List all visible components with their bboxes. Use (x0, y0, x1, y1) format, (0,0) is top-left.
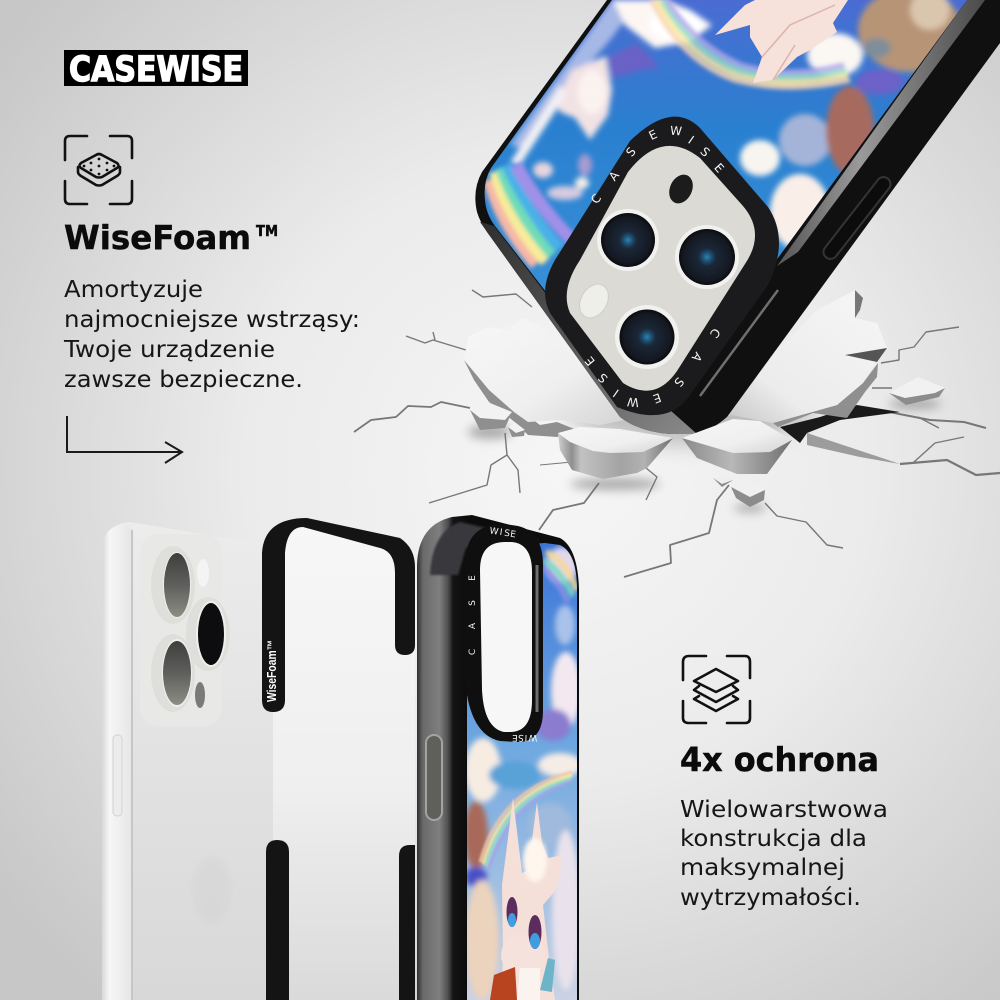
ring text: E (651, 390, 663, 406)
bottom small chunks (713, 475, 765, 507)
centre-right chunk top (682, 419, 792, 453)
logo: CASEWISE (69, 50, 243, 90)
small clouds (533, 162, 553, 178)
ring text: A (688, 349, 705, 365)
cloud band top (613, 0, 712, 48)
shadows of chunks (468, 399, 941, 512)
right clouds (779, 114, 831, 166)
right chunk side (773, 363, 878, 427)
text: protection description: wytrzymałości. (680, 883, 861, 911)
text: protection description: maksymalnej (680, 853, 845, 881)
ring text: A (468, 622, 478, 629)
kitten (490, 798, 563, 1000)
camera ring (545, 117, 779, 415)
ring window (480, 542, 532, 732)
right rock (889, 377, 945, 405)
text: WiseFoam description: Twoje urządzenie (63, 335, 275, 363)
dark hole (780, 405, 900, 443)
ring text: I (611, 386, 621, 400)
pale upper-left sky (510, 0, 640, 150)
text: protection description (680, 795, 888, 911)
side button (821, 174, 893, 262)
text: protection description: konstrukcja dla (680, 824, 867, 852)
notch (855, 290, 863, 318)
ring text (582, 124, 727, 409)
ring text: S (697, 144, 713, 160)
ring text: S (518, 732, 524, 742)
text: WiseFoam description: najmocniejsze wstrząsy: (64, 305, 360, 333)
arrow (67, 416, 182, 463)
heading: WiseFoam: TM (256, 222, 278, 240)
text: WiseFoam description: Amortyzuje (64, 275, 203, 303)
sky artwork (484, 0, 967, 291)
lenses (574, 171, 739, 369)
wall shadow under phone (565, 365, 815, 445)
ring text: W (626, 394, 640, 409)
ring text: C (707, 326, 723, 340)
centre-right chunk side (682, 438, 792, 474)
ring text: I (499, 528, 503, 538)
icon: foam pad (65, 136, 132, 204)
cracked wall (354, 290, 1000, 577)
small chunks (470, 403, 525, 437)
side button (113, 735, 122, 816)
screen artwork (464, 540, 582, 1000)
kitten body (500, 798, 563, 1000)
kitten eyes (506, 897, 518, 927)
ring text: C (468, 649, 478, 655)
upper strip (262, 518, 415, 712)
ring text: E (509, 530, 517, 540)
heading: WiseFoam: WiseFoam (64, 218, 251, 257)
ring text: S (503, 529, 511, 539)
text: WiseFoam description: zawsze bezpieczne. (64, 365, 303, 393)
left chunk top (464, 318, 625, 425)
ring text: W (669, 124, 683, 139)
ring text: S (623, 145, 639, 159)
icon: layers (683, 656, 750, 723)
pale cloud (555, 56, 612, 140)
foam sheet (273, 525, 415, 1000)
side highlight (700, 290, 778, 396)
black foam strip (262, 518, 415, 1000)
lower left strip (266, 840, 289, 1000)
ring text: I (524, 732, 528, 742)
apple mark (192, 856, 232, 924)
ring text: C (588, 191, 604, 207)
ring text: E (512, 732, 518, 742)
unicorn wing (715, 0, 848, 83)
white iPhone (102, 522, 273, 1000)
ring text: E (582, 354, 598, 368)
centre-left chunk side (558, 433, 673, 479)
ring text: W (489, 526, 499, 538)
rainbow (480, 772, 572, 868)
ring text: S (595, 370, 611, 386)
top phone (470, 0, 1000, 434)
grey side band (777, 0, 985, 266)
ring text: I (686, 133, 696, 147)
ring text: A (606, 168, 623, 184)
ring text: E (711, 160, 727, 176)
side band (102, 524, 132, 1000)
text: protection description: Wielowarstwowa (680, 795, 888, 823)
case frame (417, 515, 579, 1000)
bottom translucent edge (480, 222, 697, 434)
wedge (807, 433, 900, 464)
camera island (140, 534, 222, 726)
WiseFoam label: WiseFoam™ (265, 640, 279, 702)
ring text: E (647, 127, 659, 143)
front chunks (558, 419, 792, 507)
lower right strip (399, 845, 415, 1000)
right chunk top (700, 290, 887, 430)
side button (426, 735, 442, 820)
ring text: W (528, 732, 538, 742)
lenses (151, 546, 230, 712)
ring text: E (468, 575, 478, 581)
centre-left chunk top (558, 427, 673, 453)
left chunk side (464, 360, 577, 437)
collar (490, 967, 517, 1000)
camera island (567, 146, 755, 391)
phone body (102, 522, 273, 1000)
phone body (475, 0, 1000, 434)
ring text: S (671, 375, 687, 389)
transparent case (417, 515, 582, 1000)
text: WiseFoam description (63, 275, 360, 393)
camera ring (465, 524, 543, 742)
rainbows (652, 0, 850, 87)
ring text: S (468, 600, 478, 606)
ring text (468, 526, 538, 742)
heading: 4x ochrona: 4x ochrona (680, 740, 879, 779)
crack lines (354, 290, 1000, 577)
